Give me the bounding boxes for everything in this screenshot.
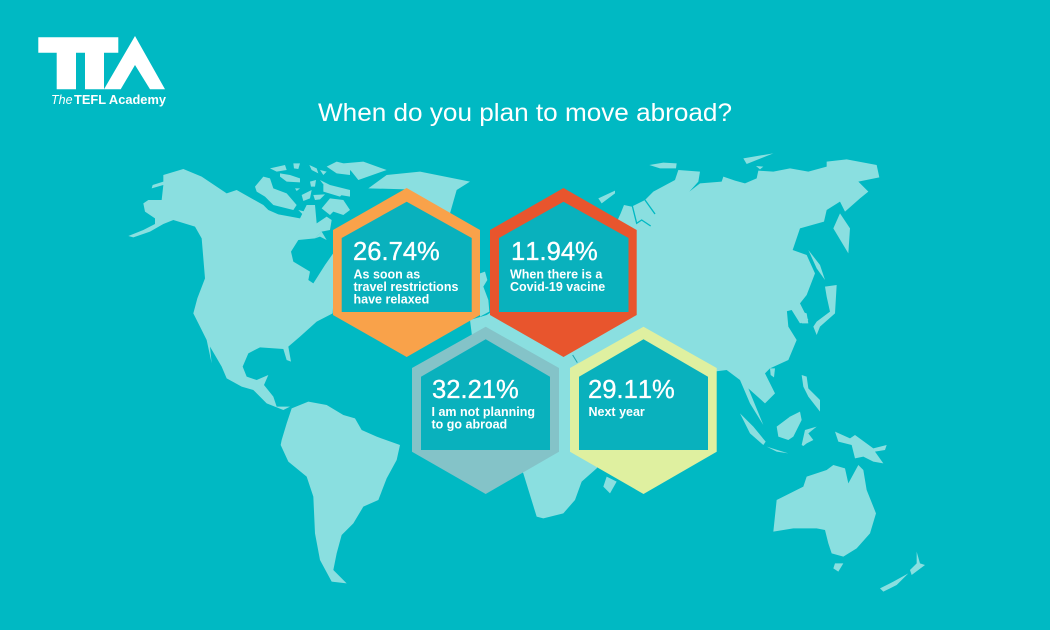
- hexagon: 32.21%: [412, 327, 559, 494]
- hexagon: 26.74%: As soon as: [354, 267, 420, 281]
- hexagon: 32.21%: to go abroad: [432, 418, 507, 432]
- hexagon: 26.74%: 26.74%: [353, 238, 440, 266]
- logo: TTA The TEFL Academy: [38, 36, 166, 107]
- hexagon: 32.21%: 32.21%: [432, 376, 519, 404]
- map: Canadian Arctic islands: [255, 162, 387, 215]
- hexagon: 26.74%: travel restrictions: [354, 280, 458, 294]
- hexagon: 26.74%: have relaxed: [354, 292, 429, 306]
- hexagon: 29.11%: 29.11%: [588, 376, 675, 404]
- hexagon: 26.74%: [333, 188, 480, 357]
- map: British Isles: [480, 272, 489, 317]
- logo: TTA The TEFL Academy: TEFL Academy: [74, 93, 166, 107]
- hexagon: 11.94%: Covid-19 vacine: [510, 280, 605, 294]
- map: Americas: [128, 169, 470, 583]
- title: When do you plan to move abroad?: [318, 99, 732, 127]
- map: Eurasia and Oceania: [593, 153, 925, 592]
- logo: TTA The TEFL Academy: The: [51, 93, 73, 107]
- world map: [128, 153, 925, 592]
- hexagon: 29.11%: [570, 327, 717, 494]
- hexagon: 29.11%: Next year: [588, 405, 645, 419]
- hexagon: 32.21%: I am not planning: [432, 405, 535, 419]
- map: Africa and Madagascar: [470, 307, 647, 518]
- hexagon: 11.94%: When there is a: [510, 267, 603, 281]
- hexagon: 11.94%: 11.94%: [511, 238, 598, 266]
- hexagon: 11.94%: [490, 188, 637, 357]
